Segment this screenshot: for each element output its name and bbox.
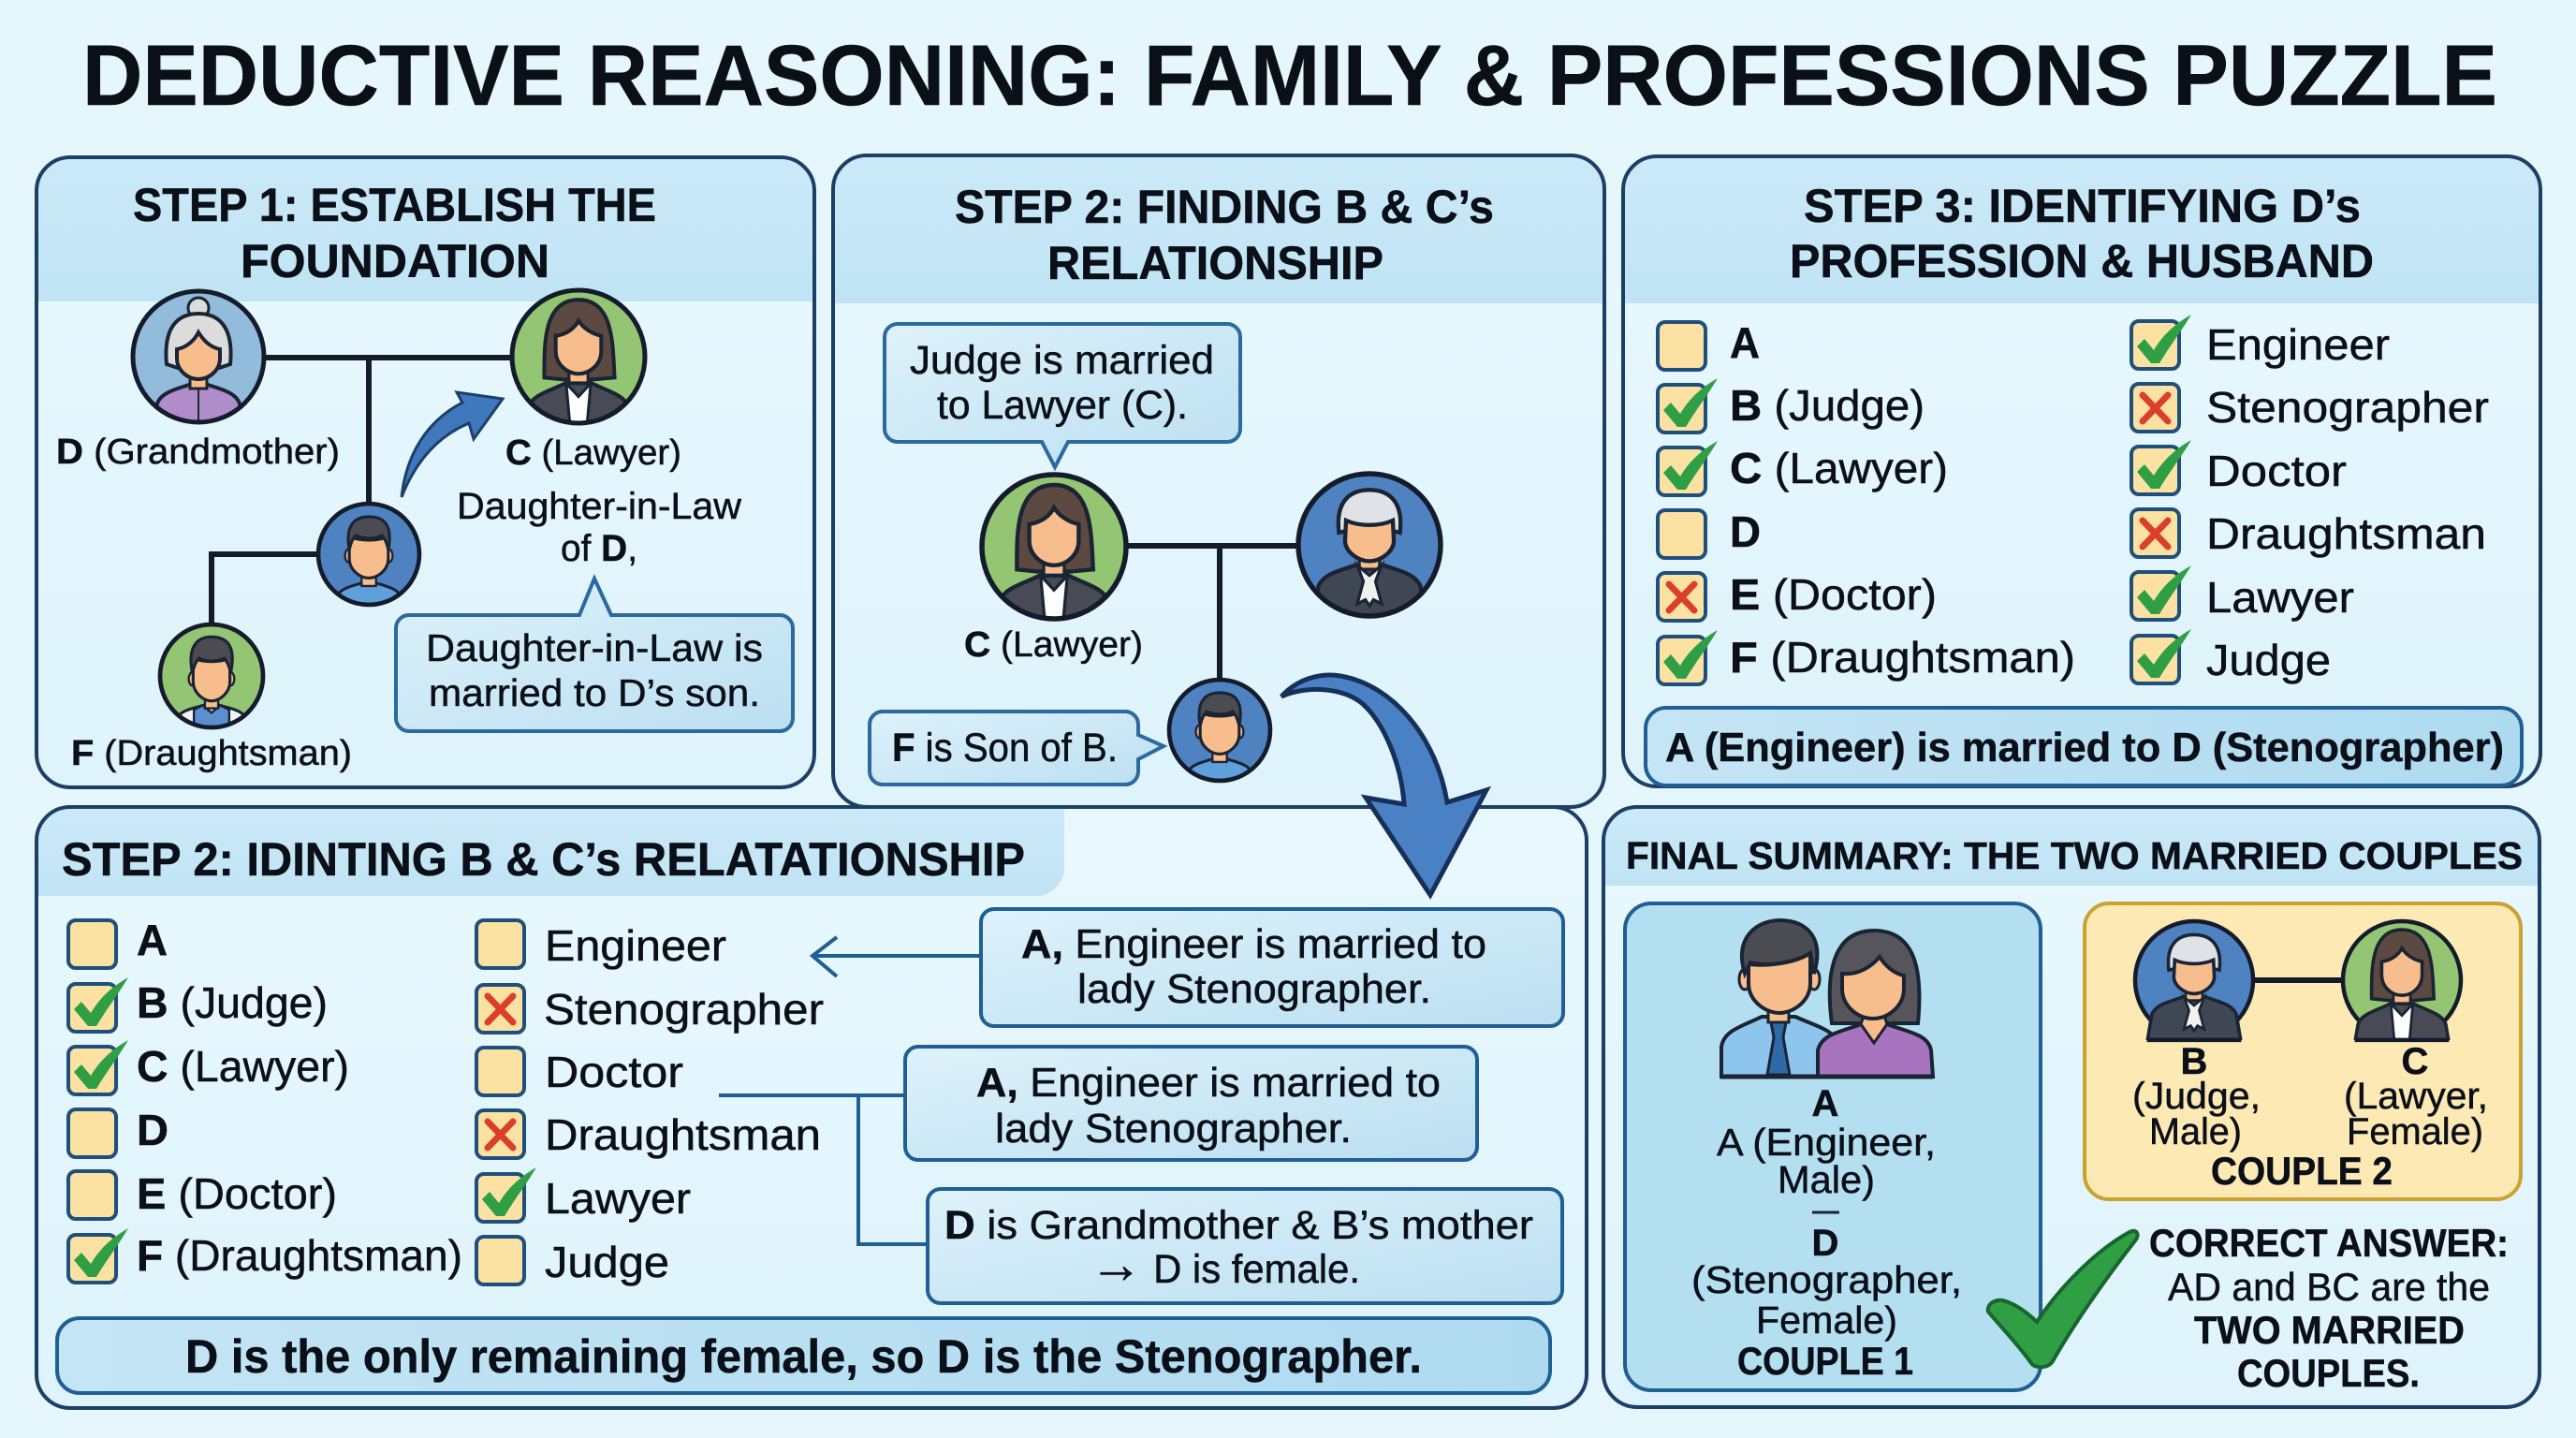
- callout: D is female: [928, 1189, 1562, 1303]
- checklist: professions: Lawyer: [2206, 573, 2354, 622]
- text: couple 2 members: Female): [2347, 1111, 2483, 1152]
- checklist: professions: Engineer: [545, 921, 726, 970]
- heading: step 1: STEP 1: ESTABLISH THE: [133, 179, 656, 231]
- checklist: people: F (Draughtsman): [1730, 633, 2075, 682]
- text: couple 1 members: A (Engineer,: [1717, 1121, 1936, 1164]
- portrait: C lawyer: [982, 475, 1126, 624]
- checklist: people: C (Lawyer): [137, 1042, 349, 1091]
- panel: step 2 identifying relationship: [37, 807, 1587, 1408]
- text: couple 2 members: (Lawyer,: [2344, 1076, 2488, 1117]
- heading: step 3: STEP 3: IDENTIFYING D’s: [1804, 180, 2361, 232]
- portrait: D grandmother: [133, 291, 264, 427]
- callout: judge married to lawyer: [885, 324, 1240, 467]
- heading: step 1: FOUNDATION: [241, 235, 549, 287]
- heading: step 2: RELATIONSHIP: [1047, 237, 1383, 289]
- callout: daughter-in-law married to son: Daughter-in-Law is: [426, 626, 763, 669]
- heading: final summary: FINAL SUMMARY: THE TWO MARRIED COUPLES: [1626, 834, 2523, 877]
- callout: D is female: → D is female.: [1090, 1234, 1360, 1295]
- heading: step 2: [955, 181, 1494, 289]
- callout: engineer married to stenographer repeated: A, Engineer is married to: [976, 1060, 1441, 1106]
- callout: engineer married to stenographer: A, Engineer is married to: [1021, 921, 1486, 967]
- checklist: people: E (Doctor): [137, 1169, 337, 1218]
- family tree connectors: [212, 358, 515, 627]
- label: C lawyer: C (Lawyer): [964, 625, 1143, 665]
- checklist: professions: Judge: [2206, 636, 2331, 684]
- text: correct answer: [2149, 1221, 2509, 1395]
- portrait: F draughtsman: [160, 624, 263, 731]
- card: couple 1: [1625, 903, 2041, 1390]
- checklist: people: [68, 916, 462, 1283]
- callout: judge married to lawyer: Judge is married: [910, 338, 1214, 383]
- checklist: people: D: [1730, 507, 1761, 556]
- checklist: professions: Stenographer: [2206, 383, 2489, 432]
- portrait: son F: [1169, 680, 1270, 785]
- icon: engineer and stenographer: [1720, 920, 1933, 1077]
- checklist: people: A: [1730, 318, 1760, 367]
- portrait: C lawyer: [512, 290, 645, 428]
- result bar: A married to D: A (Engineer) is married to D (Stenographer): [1665, 725, 2504, 770]
- checklist: people: [1658, 318, 2075, 684]
- panel: step 2 finding relationship: [833, 155, 1604, 807]
- heading: step 3: PROFESSION & HUSBAND: [1790, 235, 2374, 287]
- checklist: professions: Doctor: [2206, 447, 2347, 495]
- checklist: professions: Draughtsman: [2206, 509, 2486, 558]
- text: couple 2 members: COUPLE 2: [2211, 1149, 2393, 1193]
- label: daughter-in-law of D: Daughter-in-Law: [457, 486, 741, 527]
- card: couple 2: [2085, 903, 2521, 1199]
- callout: F is son of B: [870, 712, 1164, 785]
- portrait: son B: [318, 504, 419, 609]
- text: couple 1 members: A: [1812, 1083, 1838, 1124]
- connector: couple 2: [2247, 977, 2349, 983]
- result bar: D is stenographer: D is the only remaining female, so D is the Stenographer.: [185, 1330, 1422, 1383]
- text: couple 2 members: Male): [2149, 1111, 2242, 1152]
- portrait: B judge: [2135, 921, 2253, 1043]
- checklist: professions: [2131, 315, 2489, 684]
- family tree connectors: [1123, 546, 1301, 682]
- title: DEDUCTIVE REASONING: FAMILY & PROFESSIONS PUZZLE: [82, 28, 2497, 124]
- label: C lawyer: C (Lawyer): [505, 433, 681, 473]
- text: couple 1 members: Male): [1778, 1158, 1875, 1201]
- checklist: people: A: [137, 916, 168, 964]
- text: couple 1 members: (Stenographer,: [1691, 1258, 1962, 1301]
- panel: step 3 identifying D: [1623, 156, 2540, 786]
- callout: daughter-in-law married to son: married to D’s son.: [429, 671, 760, 714]
- callout: D is female: D is Grandmother & B’s mother: [944, 1203, 1533, 1248]
- text: couple 2 members: [2132, 1041, 2488, 1193]
- checklist: professions: Lawyer: [545, 1174, 691, 1223]
- checklist: people: B (Judge): [137, 978, 328, 1027]
- text: couple 1 members: [1691, 1083, 1962, 1383]
- result bar: D is stenographer: [57, 1318, 1550, 1393]
- text: couple 2 members: C: [2402, 1041, 2428, 1082]
- text: correct answer: TWO MARRIED: [2194, 1308, 2465, 1352]
- callout: judge married to lawyer: to Lawyer (C).: [937, 383, 1188, 428]
- icon: big green check: [1988, 1231, 2138, 1367]
- heading: step 3: [1790, 180, 2374, 287]
- checklist: professions: [476, 920, 824, 1286]
- checklist: professions: Judge: [545, 1238, 669, 1286]
- checklist: people: F (Draughtsman): [137, 1231, 462, 1280]
- portrait: B judge: [1298, 474, 1441, 621]
- callout: engineer married to stenographer repeated: [905, 1047, 1477, 1160]
- label: daughter-in-law of D: [457, 486, 741, 569]
- callout: daughter-in-law married to son: [396, 579, 793, 731]
- portrait: C lawyer: [2343, 921, 2461, 1043]
- text: correct answer: COUPLES.: [2237, 1351, 2420, 1395]
- text: correct answer: CORRECT ANSWER:: [2149, 1221, 2509, 1265]
- callout: engineer married to stenographer: lady Stenographer.: [1077, 966, 1431, 1012]
- text: couple 2 members: B: [2181, 1041, 2207, 1082]
- checklist: people: D: [137, 1106, 168, 1154]
- arrow: big blue curved down: [1281, 675, 1486, 895]
- callout: engineer married to stenographer: [981, 909, 1563, 1026]
- callout: engineer married to stenographer repeated: lady Stenographer.: [995, 1106, 1352, 1152]
- checklist: professions: Draughtsman: [545, 1110, 821, 1159]
- checklist: people: C (Lawyer): [1730, 444, 1948, 492]
- text: correct answer: AD and BC are the: [2168, 1265, 2490, 1309]
- text: couple 2 members: (Judge,: [2132, 1076, 2261, 1117]
- checklist: professions: Doctor: [545, 1048, 683, 1096]
- label: F draughtsman: F (Draughtsman): [71, 734, 352, 773]
- label: D grandmother: D (Grandmother): [56, 433, 340, 472]
- result bar: A married to D: [1646, 708, 2522, 785]
- checklist: professions: Stenographer: [544, 985, 824, 1034]
- heading: step 2: STEP 2: FINDING B & C’s: [955, 181, 1494, 233]
- heading: step 2 identifying: STEP 2: IDINTING B & C’s RELATATIONSHIP: [62, 833, 1025, 886]
- text: couple 1 members: D: [1812, 1223, 1838, 1264]
- arrow: callout to engineer: [812, 937, 981, 976]
- label: daughter-in-law of D: of D,: [561, 528, 637, 569]
- text: couple 1 members: Female): [1756, 1299, 1897, 1342]
- panel: step 1 foundation: [37, 157, 814, 787]
- connector: doctor to callouts: [719, 1095, 928, 1244]
- text: couple 1 members: COUPLE 1: [1737, 1339, 1913, 1383]
- checklist: people: E (Doctor): [1730, 570, 1937, 619]
- heading: step 1: [133, 179, 656, 287]
- checklist: professions: Engineer: [2206, 320, 2390, 369]
- callout: F is son of B: F is Son of B.: [892, 726, 1118, 770]
- arrow: curved blue to C: [402, 392, 503, 497]
- panel: final summary: [1603, 807, 2539, 1407]
- checklist: people: B (Judge): [1730, 381, 1925, 430]
